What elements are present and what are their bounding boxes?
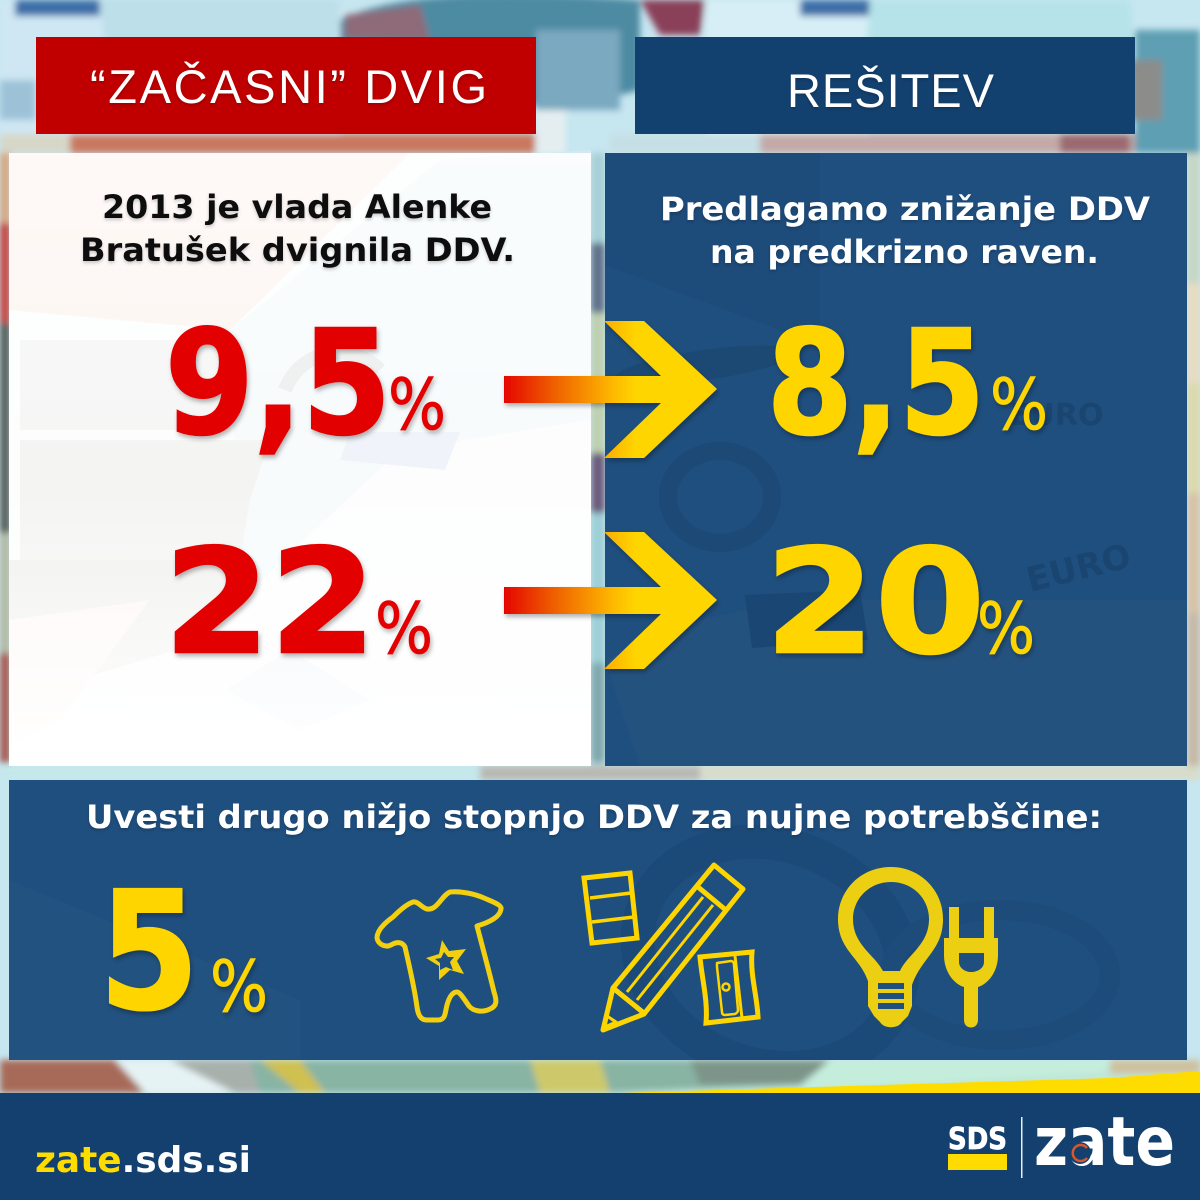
text: right intro: na predkrizno raven. — [710, 233, 1099, 271]
number: 20%: % — [977, 588, 1035, 670]
number: 8,5%: 8,5 — [767, 299, 985, 467]
number: 5% — [99, 858, 268, 1047]
panel: left white — [9, 150, 591, 766]
number: 22%: 22 — [164, 518, 376, 686]
logo: zate: zate — [1034, 1103, 1175, 1182]
panel: right blue: EURO — [1010, 398, 1103, 433]
header: rešitev: REŠITEV — [787, 64, 995, 117]
text: right intro: Predlagamo znižanje DDV — [660, 190, 1150, 228]
yellow wedge — [620, 1071, 1200, 1094]
header: začasni dvig — [36, 37, 536, 134]
number: 8,5%: % — [990, 364, 1048, 446]
icon: baby romper — [377, 892, 501, 1020]
icon: pencil, eraser and sharpener — [584, 865, 758, 1030]
text: right intro — [660, 190, 1150, 271]
number: 5%: 5 — [99, 858, 199, 1047]
panel: right blue: EURO — [1023, 536, 1135, 601]
header: začasni dvig: “ZAČASNI” DVIG — [90, 60, 487, 113]
header: rešitev — [635, 37, 1135, 134]
logo: SDS: SDS — [948, 1122, 1007, 1157]
number: 5%: % — [210, 946, 268, 1028]
text: left intro: 2013 je vlada Alenke — [102, 188, 492, 226]
arrow: second row — [504, 532, 717, 669]
number: 20%: 20 — [765, 518, 985, 686]
arrow: first row — [504, 321, 717, 458]
text: left intro — [80, 188, 515, 269]
number: 9,5%: 9,5 — [165, 299, 391, 467]
panel: bottom blue — [9, 780, 1187, 1060]
number: 9,5%: % — [388, 364, 446, 446]
panel: right blue — [605, 153, 1187, 766]
divider — [1021, 1117, 1022, 1178]
footer bar — [0, 1093, 1200, 1200]
number: 22%: % — [375, 588, 433, 670]
footer url: zate.sds.si — [35, 1140, 251, 1181]
logo: SDS — [948, 1122, 1007, 1170]
text: left intro: Bratušek dvignila DDV. — [80, 231, 515, 269]
text: bottom heading: Uvesti drugo nižjo stopnjo DDV za nujne potrebščine: — [86, 798, 1102, 836]
icon: light bulb and plug — [838, 867, 998, 1028]
